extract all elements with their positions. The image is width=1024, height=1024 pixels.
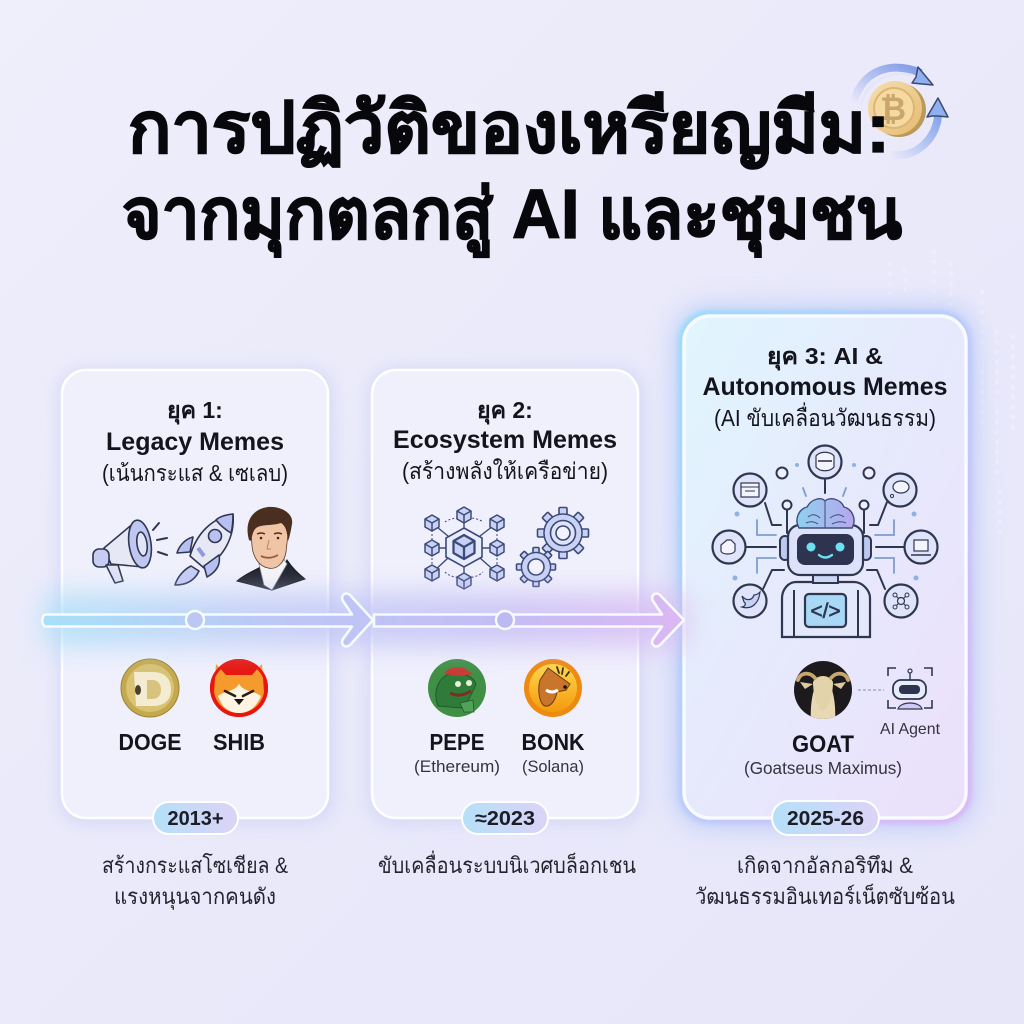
- badge: 2013+: [153, 802, 238, 834]
- label: PEPE: PEPE: [430, 729, 484, 755]
- era 3 heading: ยุค 3: AI &: [767, 343, 883, 371]
- label: Solana: (Solana): [522, 757, 584, 776]
- era 2 heading: Ecosystem Memes: [393, 426, 617, 454]
- icon: bitcoin coin with rotating arrows: [854, 67, 948, 155]
- label: Ethereum: (Ethereum): [414, 757, 500, 776]
- caption: era 1: [102, 853, 288, 910]
- label: GOAT: GOAT: [792, 731, 854, 758]
- era 1 heading: Legacy Memes: [106, 428, 284, 456]
- label: BONK: BONK: [522, 729, 585, 755]
- coin: DOGE: [121, 659, 179, 717]
- badge: 2025-26: [772, 801, 879, 835]
- icon: AI robot network: [712, 446, 938, 637]
- title: การปฏิวัติของเหรียญมีม:: [128, 89, 890, 170]
- arrow: timeline era 1 to era 2: [42, 594, 373, 646]
- icon: megaphone: [93, 519, 167, 583]
- caption: era 1: สร้างกระแสโซเชียล &: [102, 853, 288, 878]
- caption: era 2: ขับเคลื่อนระบบนิเวศบล็อกเชน: [378, 850, 636, 878]
- panel glow: era 3: [676, 308, 974, 826]
- caption: era 1: แรงหนุนจากคนดัง: [114, 884, 276, 910]
- badge: 2013+: 2013+: [168, 808, 224, 830]
- era 1 heading: ยุค 1:: [167, 397, 223, 425]
- coin: GOAT: [794, 661, 852, 722]
- label: AI Agent: AI Agent: [880, 721, 941, 738]
- satellite nodes: [712, 446, 938, 618]
- coin: BONK: [524, 659, 582, 717]
- title: [122, 89, 902, 258]
- era 1 heading: [102, 397, 288, 486]
- icon: rocket: [175, 514, 233, 585]
- icon: portrait: [237, 507, 305, 590]
- link line to AI agent: [858, 689, 884, 691]
- label: DOGE: DOGE: [118, 729, 182, 755]
- label: Goatseus Maximus: (Goatseus Maximus): [744, 758, 902, 778]
- era 1 heading: (เน้นกระแส & เซเลบ): [102, 460, 288, 486]
- label: SHIB: SHIB: [213, 729, 265, 755]
- era 2 heading: (สร้างพลังให้เครือข่าย): [402, 458, 608, 484]
- badge: 2023: [462, 802, 548, 834]
- era 2 heading: [393, 397, 617, 484]
- panel: era 2: [372, 370, 638, 818]
- icon: AI robot network: </>: [810, 600, 841, 623]
- coin: PEPE: [428, 659, 486, 717]
- era 3 heading: Autonomous Memes: [702, 373, 948, 401]
- icon: gears: [516, 508, 588, 586]
- connector lines: [745, 478, 905, 589]
- panel: era 3: [682, 314, 968, 820]
- icon: blockchain network: [425, 507, 504, 589]
- timeline glow: [45, 594, 685, 646]
- caption: era 3: เกิดจากอัลกอริทึม &: [737, 853, 913, 878]
- panel: era 1: [62, 370, 328, 818]
- panel shadows: [58, 368, 644, 824]
- badge: 2025-26: 2025-26: [787, 807, 864, 830]
- robot head: [780, 536, 790, 560]
- era 3 heading: [702, 343, 948, 431]
- badge: 2023: ≈2023: [475, 808, 535, 830]
- era 2 heading: ยุค 2:: [477, 397, 533, 425]
- caption: era 3: วัฒนธรรมอินเทอร์เน็ตซับซ้อน: [695, 882, 955, 909]
- caption: era 3: [695, 853, 955, 909]
- digital rain decoration: [890, 250, 1013, 540]
- icon: bitcoin coin with rotating arrows: ₿: [880, 91, 906, 127]
- title: จากมุกตลกสู่ AI และชุมชน: [122, 175, 902, 258]
- era 3 heading: (AI ขับเคลื่อนวัฒนธรรม): [714, 402, 936, 431]
- arrow: timeline era 2 to era 3: [374, 594, 684, 646]
- coin: SHIB: [210, 659, 268, 717]
- timeline node 2: [496, 611, 514, 629]
- brain: [797, 499, 854, 528]
- robot body: [782, 582, 870, 637]
- timeline node 1: [186, 611, 204, 629]
- icon: AI agent: [888, 668, 932, 709]
